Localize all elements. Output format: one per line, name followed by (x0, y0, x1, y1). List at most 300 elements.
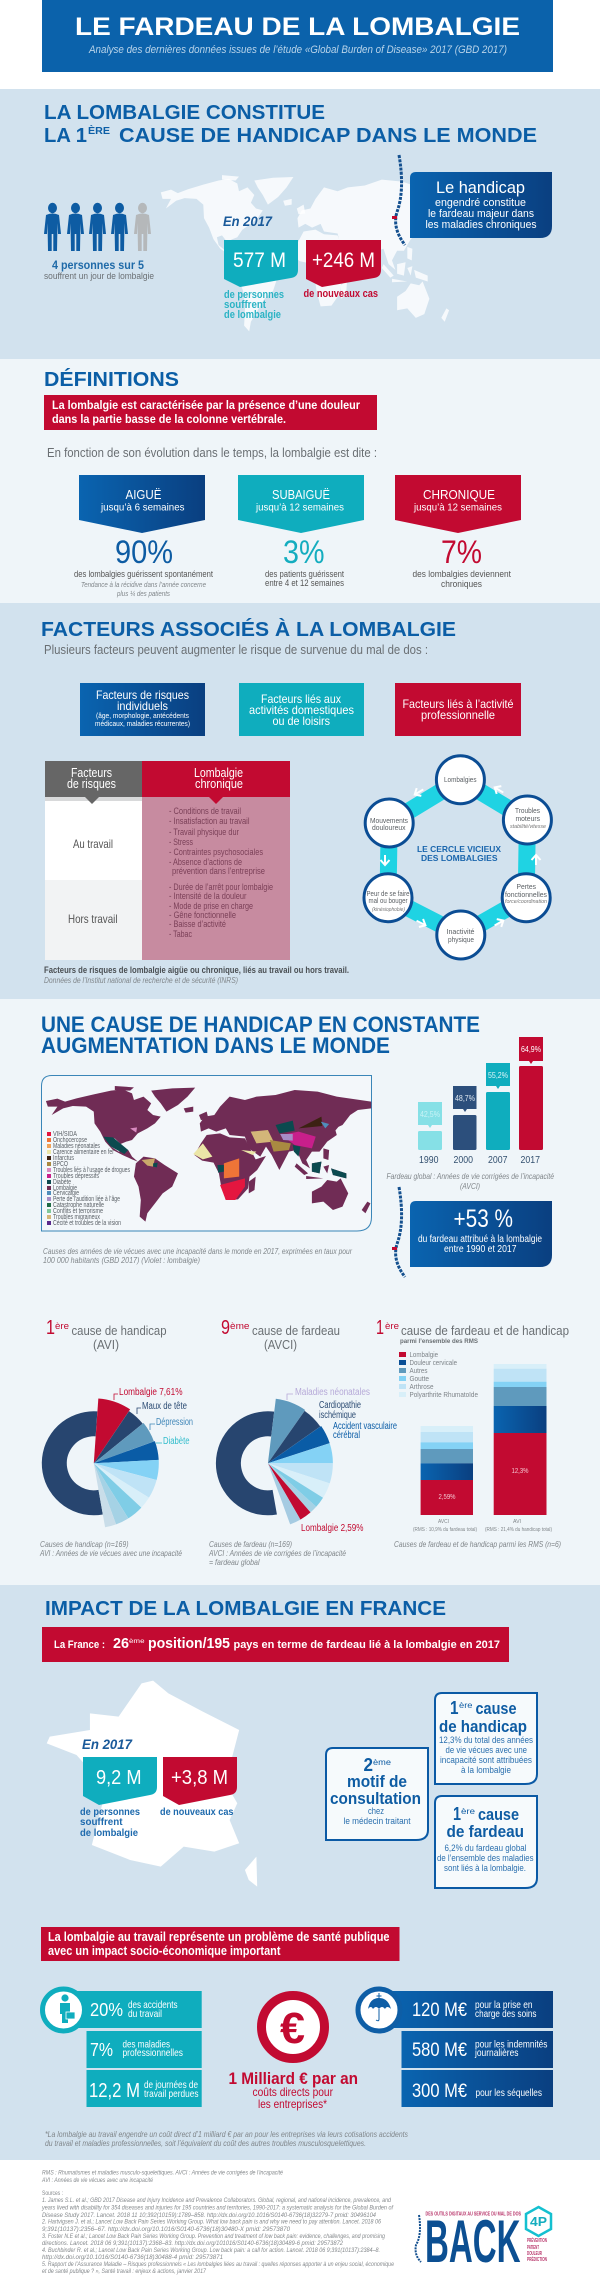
heading: 1ère cause de fardeau et de handicap: cause de fardeau et de handicap (401, 1323, 569, 1338)
stats: coûts: 120 M€ (412, 2000, 467, 2021)
caption: carte: 100 000 habitants (GBD 2017) (Violet : lombalgie) (43, 1255, 200, 1265)
box: 2ème motif de consultation: le médecin traitant (344, 1816, 411, 1826)
sources: Disease Study 2017. Lancet. 2018 11 10;392(10159):1789–858. http://dx.doi.org/10.1016/S0140-6736(18)32279-7 pmid: 30496104 (42, 2213, 377, 2219)
bar: AVI: 12,3% (512, 1468, 528, 1475)
legend: causes: Troubles migraineux (53, 1214, 100, 1221)
diagram: cercle vicieux: force/coordination (505, 899, 547, 905)
legend: RMS: Polyarthrite Rhumatoïde (410, 1390, 478, 1399)
heading: 9ème cause de fardeau: ème (230, 1321, 250, 1331)
footnote: du travail et maladies professionnelles, soit l’équivalent du coût des autres troubles musculosquelettiques. (45, 2138, 366, 2148)
table: facteurs de risques: - Mode de prise en charge (169, 901, 253, 911)
caption: fardeau global: (AVCI) (460, 1181, 480, 1191)
text: En 2017: En 2017 (223, 213, 273, 229)
heading: première cause: CAUSE DE HANDICAP DANS LE MONDE (119, 124, 537, 147)
box: 1ère cause de fardeau: cause (478, 1805, 519, 1824)
pie chart: causes de handicap (39, 1317, 193, 1558)
column: subaiguë (238, 475, 364, 588)
box: activités domestiques: Facteurs liés aux (261, 692, 341, 706)
sources: 2. Hartvigsen J. et al.; Lancet Low Back Pain Series Working Group. What low back pain is and why we need to pay attention. Lancet. 2018 06 (41, 2220, 382, 2226)
sources: AVI : Années de vie vécues avec une incapacité (41, 2178, 154, 2184)
stat: +246 M (304, 240, 381, 300)
callout: position France: position/195 (148, 1635, 230, 1652)
table: facteurs de risques: - Tabac (169, 929, 192, 939)
callout: position France: ème (129, 1639, 145, 1645)
table: facteurs de risques: chronique (195, 777, 243, 791)
sources: years lived with disability for 354 diseases and injuries for 195 countries and territories, 1990-2017: a systematic analysis for the Global Burden of (41, 2206, 394, 2212)
callout: le handicap: les maladies chroniques (426, 219, 537, 231)
bar: 2017: 2017 (520, 1154, 540, 1166)
heading: première cause (44, 101, 537, 147)
panel: augmentation dans le monde (0, 999, 600, 1585)
legend: causes: Conflits et terrorisme (53, 1208, 103, 1215)
box: 1ère cause de fardeau: 1 (453, 1804, 461, 1824)
labels: pie fardeau: Cardiopathie (319, 1400, 361, 1411)
stats: coûts: charge des soins (475, 2008, 536, 2020)
box: 1ère cause de fardeau: sont liés à la lombalgie. (444, 1863, 526, 1873)
stats: accidents et maladies: travail perdues (144, 2088, 198, 2100)
callout: position France: 26 (113, 1635, 129, 1652)
diagram: cercle vicieux: mal ou bouger (368, 896, 408, 905)
table: facteurs de risques: - Contraintes psychosociales (169, 847, 263, 857)
box: facteurs individuels: Facteurs de risques (96, 688, 189, 702)
bar: 2017: 64,9% (521, 1045, 541, 1054)
heading: facteurs: FACTEURS ASSOCIÉS À LA LOMBALGIE (41, 618, 456, 641)
caption: pie handicap (39, 1539, 182, 1558)
icon: spine (392, 155, 405, 245)
legend: causes: BPCO (53, 1161, 68, 1168)
pie chart: causes de fardeau (208, 1317, 397, 1567)
box: activités domestiques: activités domestiques (249, 703, 354, 717)
callout: santé publique (41, 1927, 400, 1961)
stat: +3,8 M: de nouveaux cas (160, 1806, 234, 1818)
table: facteurs de risques: - Travail physique dur (169, 827, 239, 837)
heading: 9ème cause de fardeau: cause de fardeau (252, 1323, 340, 1338)
column: subaiguë: des patients guérissent (265, 569, 344, 579)
stats: accidents et maladies: professionnelles (122, 2047, 183, 2059)
bar: AVI: AVI (513, 1519, 521, 1525)
caption: pie fardeau: Causes de fardeau (n=169) (209, 1539, 292, 1549)
table: facteurs de risques: prévention dans l’entreprise (172, 866, 265, 876)
text: intro facteurs: Plusieurs facteurs peuvent augmenter le risque de survenue du mal de dos : (44, 642, 428, 657)
caption: fardeau global (386, 1171, 554, 1191)
sources: 5. Rapport de l’Assurance Maladie – Risques professionnels « Les lombalgies liées au travail : quelles réponses apporter à un enjeu social, économique (42, 2262, 395, 2268)
column: aiguë: AIGUË (126, 487, 162, 502)
subtitle: Analyse des dernières données issues de l’étude «Global Burden of Disease» 2017 (GBD 2017) (88, 44, 507, 56)
title: LE FARDEAU DE LA LOMBALGIE (75, 13, 520, 41)
callout: le handicap: le fardeau majeur dans (428, 208, 534, 220)
legend: RMS: Autres (410, 1366, 428, 1375)
table: facteurs de risques (45, 761, 290, 960)
table: facteurs de risques: - Gêne fonctionnelle (169, 910, 236, 920)
diagram: cercle vicieux: DES LOMBALGIES (421, 853, 498, 863)
bar: AVCI: (RMS : 10,9% du fardeau total) (413, 1527, 477, 1533)
callout: définition lombalgie (44, 395, 377, 430)
table: facteurs de risques: - Stress (169, 837, 193, 847)
caption: pie handicap: AVI : Années de vie vécues avec une incapacité (39, 1548, 182, 1558)
labels: pie fardeau: Lombalgie 2,59% (301, 1523, 364, 1534)
text: évolution: En fonction de son évolution dans le temps, la lombalgie est dite : (47, 446, 377, 460)
column: aiguë: jusqu’à 6 semaines (100, 502, 184, 514)
box: activité professionnelle (395, 683, 521, 736)
stats: accidents et maladies: 7% (90, 2040, 113, 2060)
heading: 1ère cause de fardeau et de handicap: ère (385, 1321, 399, 1331)
box: 1ère cause de handicap: à la lombalgie (461, 1765, 511, 1775)
heading: 1ère cause de fardeau et de handicap: parmi l’ensemble des RMS (400, 1338, 479, 1345)
heading: 9ème cause de fardeau: (AVCI) (264, 1337, 297, 1352)
column: aiguë: des lombalgies guérissent spontanément (74, 569, 213, 579)
diagram: cercle vicieux: Inactivité (446, 927, 474, 936)
stat: 577 M: souffrent (224, 299, 266, 311)
box: activité professionnelle: Facteurs liés à l’activité (402, 697, 514, 711)
logo: BACK 4P: 4P (530, 2214, 547, 2229)
icon: five people (44, 203, 151, 251)
bar: AVI (485, 1364, 552, 1533)
legend: causes: Onchocercose (53, 1137, 87, 1144)
column: chronique: jusqu’à 12 semaines (413, 502, 502, 514)
bar: 2000: 48,7% (455, 1094, 475, 1103)
labels: pie fardeau: Accident vasculaire (333, 1421, 397, 1432)
stat: 9,2 M (80, 1757, 157, 1839)
callout: le handicap: engendré constitue (435, 197, 526, 209)
labels: pie handicap (114, 1387, 193, 1447)
sources (41, 2170, 395, 2275)
callout: +53 % (410, 1201, 552, 1267)
stats: accidents et maladies: 12,2 M (89, 2080, 140, 2102)
box: facteurs individuels: (âge, morphologie, antécédents (96, 713, 189, 720)
stat: 9,2 M: de personnes (80, 1806, 140, 1818)
labels: pie handicap: Maux de tête (142, 1401, 187, 1412)
column: subaiguë: jusqu’à 12 semaines (255, 502, 344, 514)
icon: travailleur (42, 1989, 84, 2031)
bar: 1990: 1990 (419, 1154, 439, 1166)
labels: pie fardeau: Maladies néonatales (295, 1387, 370, 1398)
legend: causes: Perte de l’audition liée à l’âge (53, 1196, 120, 1203)
heading: définitions: DÉFINITIONS (44, 368, 179, 391)
caption: RMS: Causes de fardeau et de handicap parmi les RMS (n=6) (394, 1539, 561, 1549)
stat: 9,2 M: souffrent (80, 1816, 123, 1828)
box: 1ère cause de handicap: incapacité sont attribuées (440, 1755, 532, 1765)
box: activités domestiques (239, 683, 364, 736)
column: subaiguë: entre 4 et 12 semaines (265, 578, 344, 588)
caption: pie fardeau: = fardeau global (209, 1557, 260, 1567)
sources: 9;391(10137):2356–67. http://dx.doi.org/10.1016/S0140-6736(18)30480-X pmid: 29573870 (42, 2227, 291, 2233)
heading: augmentation: UNE CAUSE DE HANDICAP EN CONSTANTE (41, 1012, 480, 1037)
bar: 2007 (486, 1063, 510, 1166)
box: 2ème motif de consultation (326, 1748, 428, 1840)
stat: +246 M: de nouveaux cas (304, 288, 378, 300)
logo: BACK 4P: PRÉVENTION (527, 2236, 547, 2244)
legend: causes: Diabète (53, 1179, 71, 1186)
stats: coûts: pour la prise en (475, 1999, 533, 2011)
table: facteurs de risques: - Insatisfaction au travail (169, 816, 250, 826)
footnote (45, 2129, 409, 2148)
table: facteurs de risques: - Intensité de la douleur (169, 891, 247, 901)
legend: causes: Lombalgie (53, 1185, 77, 1192)
bar: 2017 (519, 1037, 543, 1166)
diagram: cercle vicieux: Mouvements (370, 816, 408, 825)
caption: table: Données de l’Institut national de recherche et de sécurité (INRS) (44, 976, 238, 985)
column: chronique: 7% (441, 534, 482, 570)
heading: 1ère cause de fardeau et de handicap: 1 (376, 1317, 384, 1339)
caption: table (44, 965, 349, 985)
box: 1ère cause de handicap: ère (459, 1700, 473, 1710)
legend: causes: Infarctus (53, 1155, 74, 1162)
callout: +53 %: +53 % (454, 1205, 513, 1233)
stats: coûts: pour les indemnités (475, 2038, 548, 2050)
diagram: cercle vicieux: stabilité/vitesse (510, 824, 546, 830)
panel: première cause de handicap (0, 89, 600, 359)
diagram: cercle vicieux: LE CERCLE VICIEUX (417, 844, 501, 854)
stat: 577 M: 577 M (233, 249, 286, 272)
sources: 4. Buchbinder R. et al.; Lancet Low Back Pain Series Working Group. Low back pain: a call for action. Lancet. 2018 06 9;391(10137):2384–8. (42, 2248, 380, 2254)
legend: causes: Maladies néonatales (53, 1143, 100, 1150)
column: subaiguë: SUBAIGUË (272, 487, 330, 502)
diagram: cercle vicieux: Lombalgies (444, 775, 477, 784)
stats: coûts: 580 M€ (412, 2040, 467, 2061)
box: 1ère cause de handicap (435, 1693, 537, 1784)
box: 1ère cause de fardeau: 6,2% du fardeau global (444, 1843, 526, 1853)
heading: 1ère cause de handicap: cause de handicap (72, 1323, 166, 1338)
box: 1ère cause de fardeau (435, 1796, 537, 1888)
diagram: cercle vicieux: physique (448, 935, 474, 944)
stats: accidents et maladies: de journées de (144, 2079, 198, 2091)
box: facteurs individuels: médicaux, maladies récurrentes) (95, 721, 190, 728)
stacked bar chart: RMS (376, 1317, 569, 1549)
bar: AVCI (413, 1426, 477, 1533)
callout: position France: pays en terme de fardeau lié à la lombalgie en 2017 (234, 1639, 500, 1651)
diagram: cercle vicieux (364, 756, 551, 959)
heading: augmentation: AUGMENTATION DANS LE MONDE (41, 1033, 390, 1058)
box: 2ème motif de consultation: chez (368, 1806, 384, 1816)
callout: +53 %: entre 1990 et 2017 (444, 1244, 517, 1255)
bar chart: fardeau global (418, 1037, 543, 1166)
box: 2ème motif de consultation: consultation (330, 1789, 421, 1808)
box: activité professionnelle: professionnelle (421, 708, 495, 722)
caption: carte (43, 1246, 353, 1265)
bar: AVCI: AVCI (438, 1519, 449, 1525)
column: chronique: chroniques (441, 579, 482, 589)
diagram: cercle vicieux: douloureux (372, 823, 406, 832)
box: 1ère cause de handicap: 1 (450, 1698, 458, 1718)
stat: +246 M: +246 M (312, 249, 375, 272)
box: 2ème motif de consultation: 2 (364, 1755, 373, 1775)
bar: 2000 (453, 1086, 476, 1166)
text: 4 personnes sur 5 (44, 258, 154, 281)
legend: causes: Troubles liés à l’usage de drogues (53, 1167, 130, 1174)
stat: 577 M (224, 240, 298, 321)
box: 1ère cause de handicap: 12,3% du total des années (439, 1735, 533, 1745)
box: activités domestiques: ou de loisirs (272, 714, 330, 728)
diagram: cercle vicieux: moteurs (516, 814, 540, 823)
heading: 1ère cause de handicap: (AVI) (93, 1337, 119, 1352)
legend: RMS: Goutte (410, 1374, 429, 1383)
stats: coûts: journalières (474, 2047, 518, 2059)
world map background (161, 175, 450, 331)
sources: 1. James S.L. et al.; GBD 2017 Disease and Injury Incidence and Prevalence Collaborators. Global, regional, and national incidence, prevalence, and (42, 2198, 392, 2204)
stat: 1 milliard (228, 1996, 358, 2111)
icon: spine (392, 1187, 405, 1277)
legend: causes: Cervicalgie (53, 1190, 79, 1197)
legend: causes: VIH/SIDA (53, 1131, 77, 1138)
heading: première cause: LA 1 (44, 124, 87, 147)
callout: +53 %: du fardeau attribué à la lombalgie (418, 1234, 542, 1245)
table: facteurs de risques: - Absence d’actions de (169, 857, 242, 867)
labels: pie fardeau: cérébral (333, 1430, 360, 1441)
table: facteurs de risques: Au travail (73, 837, 113, 851)
sources: directions. Lancet. 2018 06 9;391(10137):2368–83. http://dx.doi.org/101016/S0140-6736(18)30489-6 pmid: 29573872 (42, 2241, 344, 2247)
table: facteurs de risques: Lombalgie (194, 766, 243, 780)
sources: http://dx.doi.org/10.1016/S0140-6736(18)30488-4 pmid: 29573871 (42, 2255, 223, 2261)
diagram: cercle vicieux: Troubles (515, 806, 540, 815)
caption: fardeau global: Fardeau global : Années de vie corrigées de l’incapacité (386, 1171, 554, 1181)
box: 1ère cause de fardeau: ère (461, 1806, 475, 1816)
column: chronique: des lombalgies deviennent (412, 569, 511, 579)
bar: 2000: 2000 (454, 1154, 473, 1166)
caption: table: Facteurs de risques de lombalgie aigüe ou chronique, liés au travail ou hors travail. (44, 965, 349, 975)
text: 4 personnes sur 5: souffrent un jour de lombalgie (44, 271, 154, 281)
diagram: cercle vicieux: Pertes (516, 882, 536, 891)
header banner (42, 0, 553, 72)
callout: le handicap: Le handicap (436, 178, 525, 197)
logo: BACK 4P (416, 2207, 551, 2275)
legend: causes: Cécité et troubles de la vision (53, 1220, 121, 1227)
labels: pie handicap: Dépression (156, 1417, 193, 1428)
table: facteurs de risques: Hors travail (68, 912, 118, 926)
column: aiguë: Tendance à la récidive dans l’année concerne (81, 580, 206, 589)
panel: définitions (0, 359, 600, 603)
stat: 577 M: de lombalgie (224, 309, 281, 321)
map: causes AVI dans le monde (42, 1076, 372, 1231)
labels: pie handicap: Lombalgie 7,61% (119, 1387, 183, 1398)
sources: Sources : (42, 2191, 63, 2197)
bar: AVCI: 2,59% (438, 1494, 456, 1501)
caption: pie fardeau: AVCI : Années de vie corrigées de l’incapacité (208, 1548, 346, 1558)
heading: 9ème cause de fardeau (221, 1317, 340, 1352)
heading: 9ème cause de fardeau: 9 (221, 1317, 230, 1339)
table: facteurs de risques: - Conditions de travail (169, 806, 241, 816)
heading: 1ère cause de handicap: ère (55, 1321, 69, 1331)
legend: RMS: Douleur cervicale (410, 1358, 457, 1367)
logo: BACK 4P: BACK (425, 2208, 520, 2275)
callout: position France (42, 1627, 509, 1662)
legend: RMS: Lombalgie (410, 1350, 438, 1359)
box: facteurs individuels: individuels (117, 699, 168, 713)
legend: causes: Troubles dépressifs (53, 1173, 99, 1180)
table: facteurs de risques: - Durée de l’arrêt pour lombalgie (169, 882, 273, 892)
box: 1ère cause de fardeau: de l’ensemble des maladies (437, 1853, 534, 1863)
sources: 3. Foster N.E et al.; Lancet Low Back Pain Series Working Group. Prevention and treatment of low back pain: evidence, challenges, and promising (42, 2234, 386, 2240)
column: chronique (395, 475, 521, 589)
logo: BACK 4P: PATIENT (527, 2245, 539, 2251)
bar: 2007: 2007 (488, 1154, 508, 1166)
stats: coûts: 300 M€ (412, 2081, 467, 2102)
caption: pie handicap: Causes de handicap (n=169) (40, 1539, 129, 1549)
box: 1ère cause de handicap: de handicap (439, 1717, 527, 1736)
icon: euro: € (280, 2004, 305, 2053)
panel: facteurs associés (0, 603, 600, 999)
heading: 1ère cause de handicap: 1 (46, 1317, 55, 1339)
stats: accidents et maladies: des maladies (122, 2038, 170, 2050)
callout: définition lombalgie: dans la partie basse de la colonne vertébrale. (52, 412, 286, 426)
stats: accidents et maladies (42, 1989, 202, 2107)
table: facteurs de risques: Facteurs (71, 766, 112, 780)
diagram: cercle vicieux: Peur de se faire (366, 889, 410, 898)
box: 1ère cause de handicap: de vie vécues avec une (446, 1745, 527, 1755)
column: aiguë: 90% (115, 534, 173, 570)
stat: 9,2 M: 9,2 M (96, 1767, 142, 1789)
heading: première cause: ÈRE (88, 124, 110, 137)
stats: accidents et maladies: des accidents (128, 1999, 178, 2011)
callout: le handicap (410, 172, 552, 238)
logo: BACK 4P: DOULEUR (527, 2251, 542, 2257)
stat: 577 M: de personnes (224, 289, 284, 301)
bar: 2007: 55,2% (488, 1071, 508, 1080)
legend: causes (47, 1131, 130, 1227)
heading: 1ère cause de handicap (46, 1317, 166, 1352)
column: aiguë: plus ¼ des patients (116, 589, 170, 598)
callout: santé publique: avec un impact socio-économique important (48, 1944, 281, 1958)
callout: position France: La France : (54, 1639, 105, 1651)
stats: coûts: pour les séquelles (476, 2087, 542, 2099)
box: 2ème motif de consultation: motif de (347, 1772, 407, 1791)
bar: 1990 (418, 1102, 442, 1166)
bar: AVI: (RMS : 21,4% du handicap total) (485, 1527, 552, 1533)
logo: BACK 4P: DES OUTILS DIGITAUX AU SERVICE DU MAL DE DOS (426, 2212, 521, 2218)
legend: causes: Catastrophe naturelle (53, 1202, 104, 1209)
diagram: cercle vicieux: (kinésiophobie) (372, 907, 405, 913)
box: 1ère cause de handicap: cause (476, 1699, 516, 1718)
box: facteurs individuels (80, 683, 205, 736)
stat: 1 milliard: 1 Milliard € par an (228, 2069, 358, 2088)
sources: et de santé publique ? », Santé travail : enjeux & actions, janvier 2017 (42, 2269, 207, 2275)
table: facteurs de risques: de risques (67, 777, 116, 791)
labels: pie fardeau (287, 1387, 397, 1534)
sources: RMS : Rhumatismes et maladies musculo-squelettiques. AVCI : Années de vie corrigées de l’incapacité (42, 2170, 284, 2176)
caption: pie fardeau (208, 1539, 346, 1567)
stat: +3,8 M (160, 1757, 237, 1818)
heading: augmentation (41, 1012, 480, 1058)
labels: pie fardeau: ischémique (319, 1410, 356, 1421)
column: aiguë (74, 475, 213, 598)
stat: 1 milliard: coûts directs pour (252, 2085, 333, 2099)
heading: première cause: LA LOMBALGIE CONSTITUE (44, 101, 325, 124)
legend: causes: Carence alimentaire en fer (53, 1149, 114, 1156)
table: facteurs de risques: - Baisse d’activité (169, 919, 226, 929)
bar: 1990: 42,5% (420, 1110, 440, 1119)
legend: RMS: Arthrose (410, 1382, 434, 1391)
column: subaiguë: 3% (283, 534, 324, 570)
heading: 1ère cause de fardeau et de handicap (376, 1317, 569, 1345)
diagram: cercle vicieux: fonctionnelles (505, 890, 547, 899)
icon: parapluie (358, 1989, 400, 2031)
legend: RMS (399, 1350, 478, 1399)
stats: accidents et maladies: 20% (90, 2000, 123, 2020)
text: En 2017 France: En 2017 (82, 1736, 133, 1752)
stats: accidents et maladies: du travail (128, 2008, 162, 2020)
caption: carte: Causes des années de vie vécues avec une incapacité dans le monde en 2017, exprimées en taux pour (43, 1246, 353, 1256)
stat: 9,2 M: de lombalgie (80, 1827, 138, 1839)
logo: BACK 4P: PRÉDICTION (527, 2255, 547, 2263)
panel: impact en France (0, 1585, 600, 2160)
box: 2ème motif de consultation: ème (373, 1757, 391, 1767)
callout: définition lombalgie: La lombalgie est caractérisée par la présence d’une douleur (52, 398, 360, 412)
callout: santé publique: La lombalgie au travail représente un problème de santé publique (48, 1930, 390, 1944)
column: chronique: CHRONIQUE (423, 487, 495, 502)
stats: coûts (358, 1989, 553, 2107)
map: France (47, 1681, 257, 1887)
stat: 1 milliard: les entreprises* (258, 2097, 327, 2111)
heading: impact: IMPACT DE LA LOMBALGIE EN FRANCE (45, 1597, 446, 1620)
